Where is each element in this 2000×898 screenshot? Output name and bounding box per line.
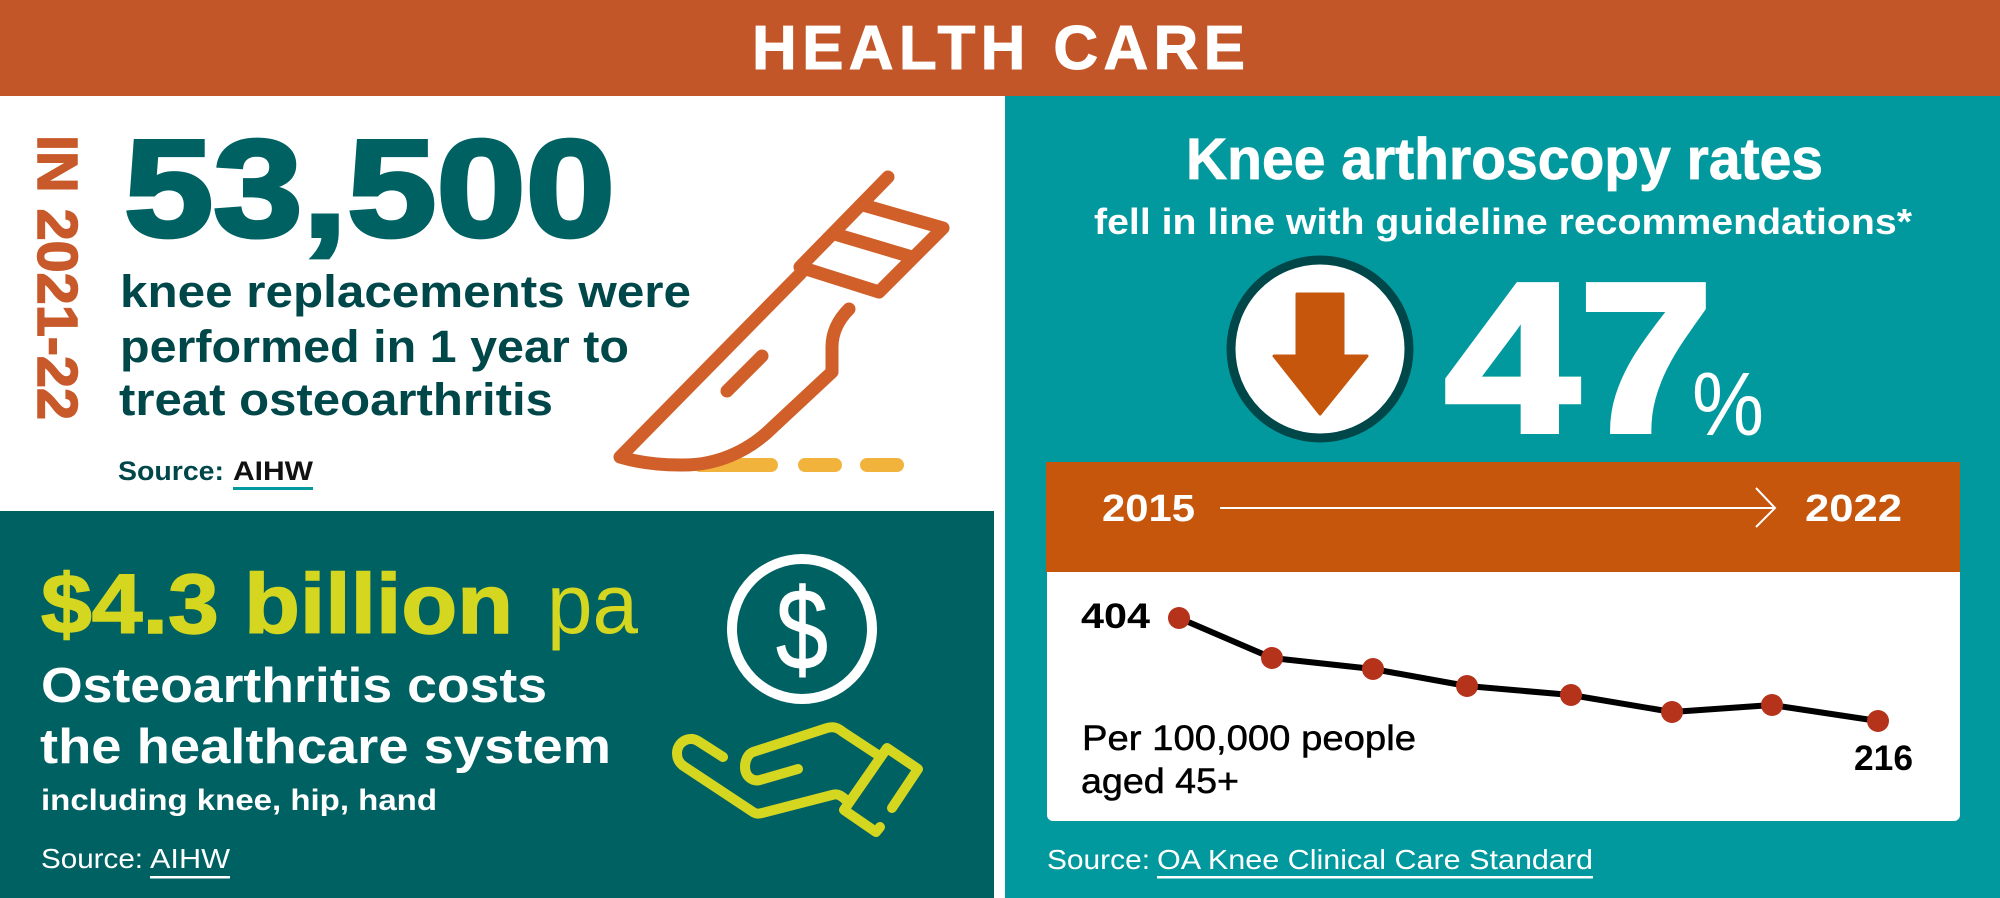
vertical year label: IN 2021-22 [25,135,89,420]
source: OA Knee Clinical Care Standard [1157,844,1593,875]
cost heading: $4.3 billion [41,557,513,651]
heading: Knee arthroscopy rates [1186,127,1823,192]
icon: hand [677,727,918,832]
cost description: the healthcare system [40,720,611,774]
icon: dollar coin [732,559,872,699]
big percentage: % [1692,355,1764,455]
source [1047,844,1593,878]
subheading: fell in line with guideline recommendations* [1094,201,1912,242]
source: AIHW [150,843,231,874]
cost description [40,659,611,817]
panel: cost [0,511,994,898]
panel: knee replacements [25,112,943,490]
icon: down arrow in circle [1231,260,1409,438]
source: AIHW [233,456,314,486]
line chart: Per 100,000 people [1082,719,1416,758]
icon: scalpel [620,177,943,465]
timeline bar: 2022 [1805,488,1902,530]
big number: 53,500 [124,112,615,266]
source: Source: [118,456,224,486]
line chart: 216 [1854,739,1913,778]
header banner [0,0,2000,96]
source: Source: [41,843,143,874]
big percentage: 47 [1445,239,1713,476]
source [41,843,231,878]
cost heading: pa [547,557,638,651]
description: treat osteoarthritis [119,374,553,425]
icon: dollar coin: $ [776,566,828,694]
panel: knee arthroscopy [1005,96,2000,898]
line chart: 404 [1081,597,1151,636]
cost description: including knee, hip, hand [41,784,437,817]
source [118,456,314,490]
description [119,266,691,425]
timeline bar: 2015 [1102,488,1195,530]
line chart: aged 45+ [1081,762,1239,801]
description: knee replacements were [120,266,691,317]
timeline bar [1046,462,1960,572]
cost description: Osteoarthritis costs [41,659,547,713]
source: Source: [1047,844,1150,875]
header banner: HEALTH CARE [752,14,1245,83]
description: performed in 1 year to [120,321,629,372]
line chart [1047,572,1960,821]
